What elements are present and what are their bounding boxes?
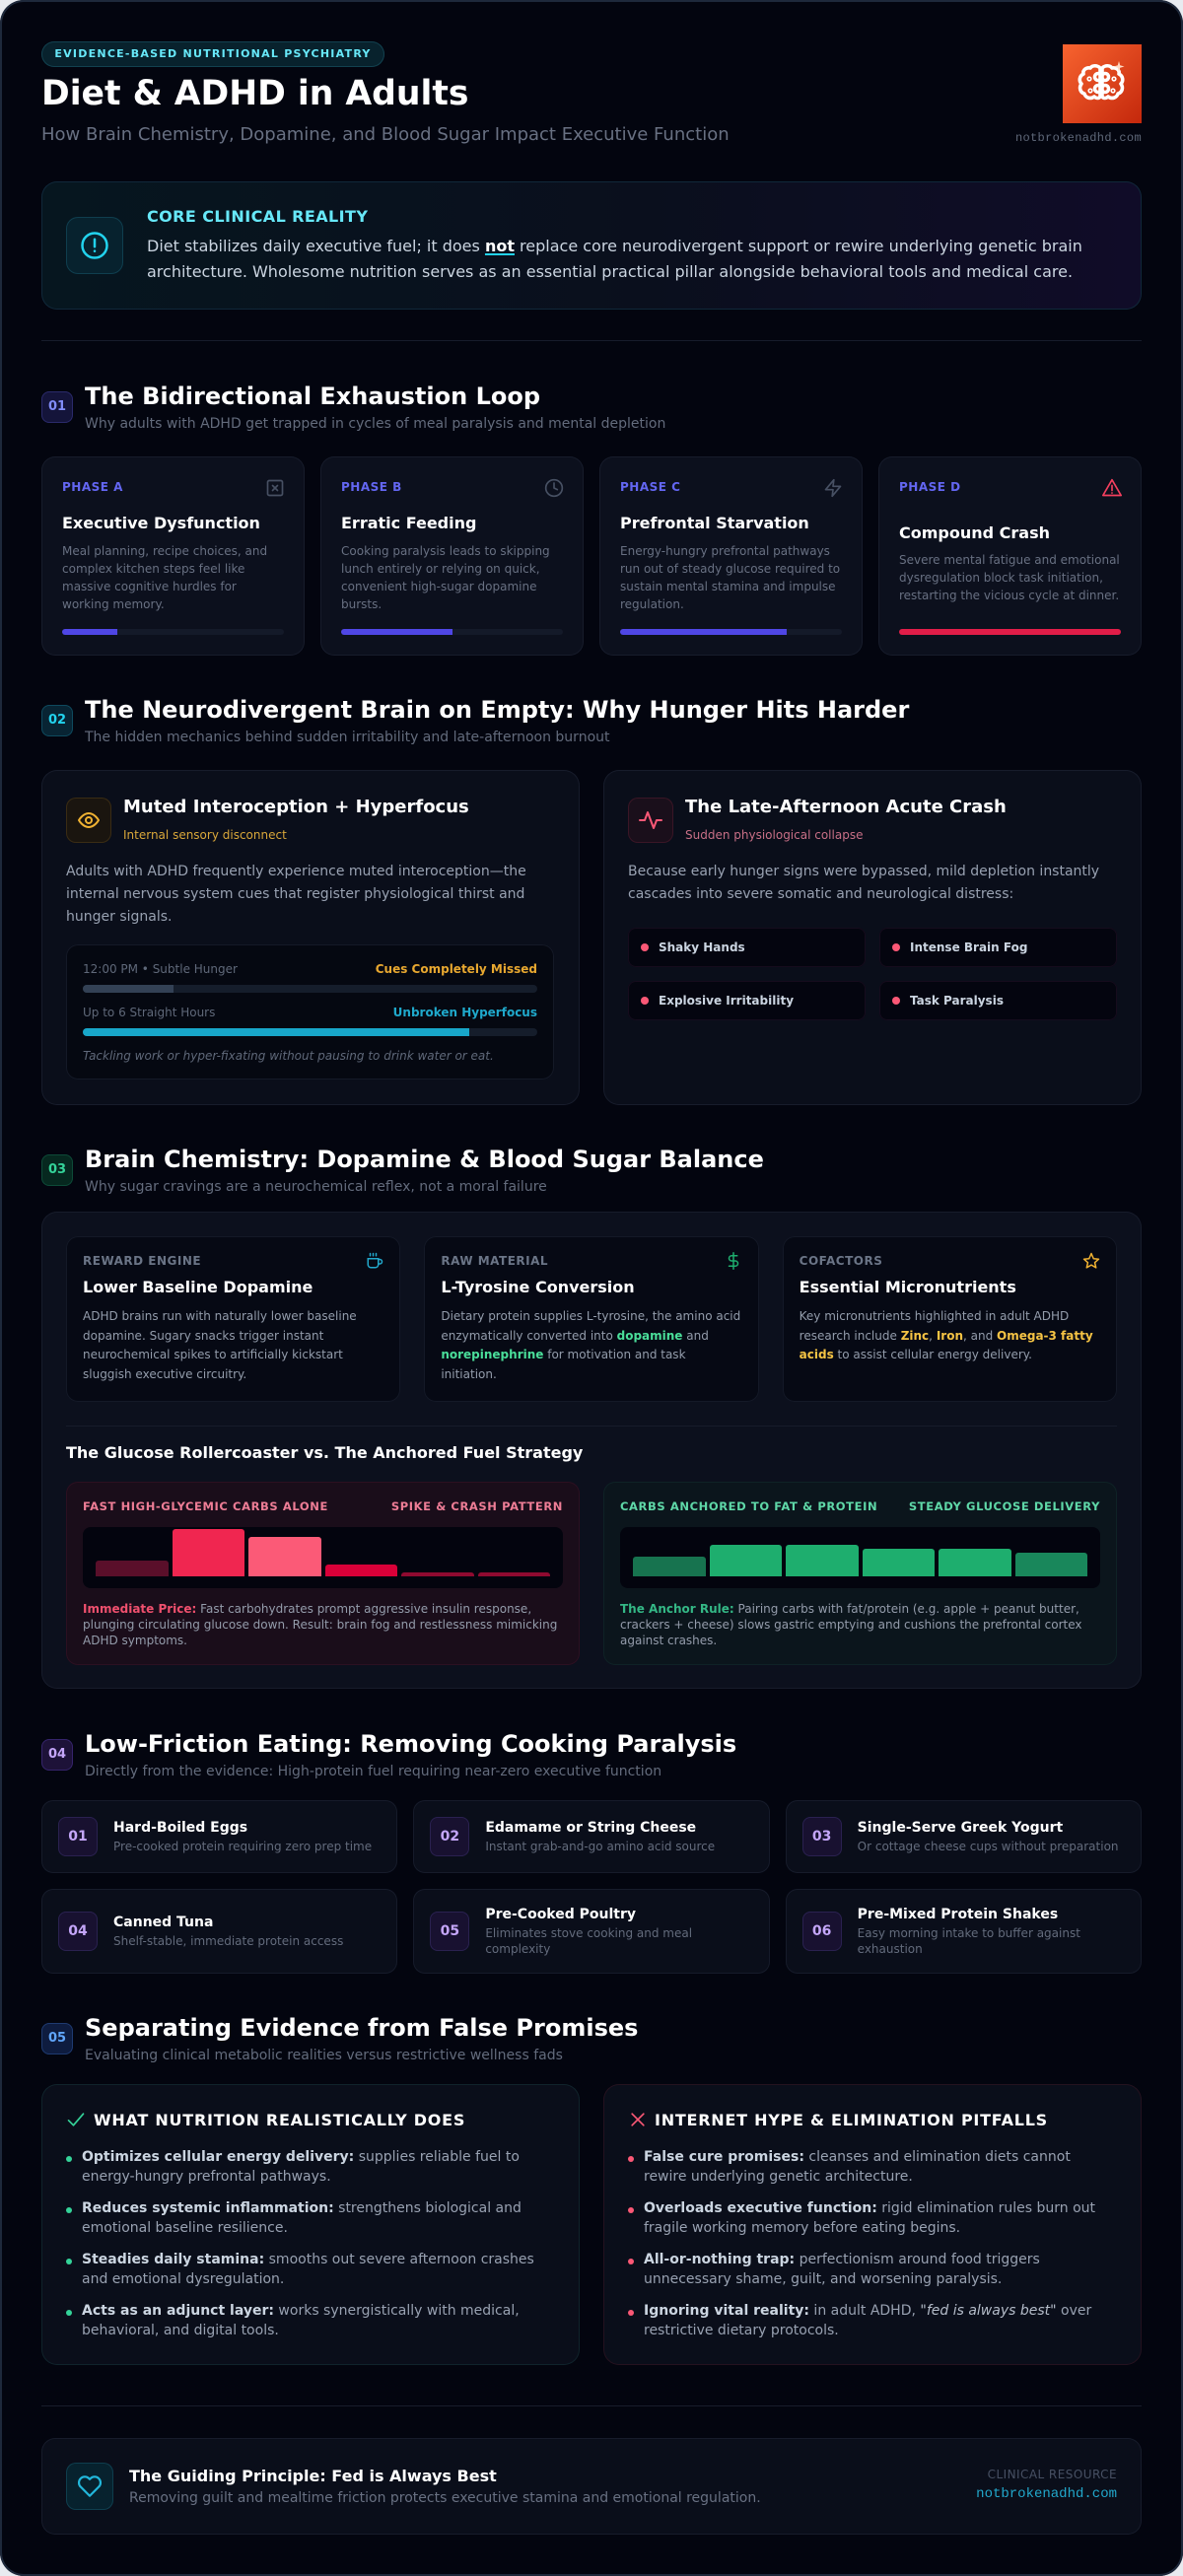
icon: brain logo (1063, 44, 1142, 123)
card: phase C: Prefrontal Starvation (620, 514, 809, 532)
food card: tuna: Shelf-stable, immediate protein access (113, 1934, 343, 1948)
food card: yogurt: 03 (812, 1829, 831, 1845)
card: cofactors: Essential Micronutrients (800, 1278, 1016, 1296)
icon: lightning (824, 479, 842, 497)
bullet: unnecessary shame, guilt, and worsening paralysis. (644, 2271, 1002, 2287)
callout body: architecture. Wholesome nutrition serves as an essential practical pillar alongside behavioral tools and medical care. (147, 262, 1073, 281)
bullet (628, 2149, 1071, 2185)
card: reward engine: REWARD ENGINE (83, 1254, 201, 1268)
card: raw material: norepinephrine for motivation and task (441, 1348, 686, 1361)
panel: spike and crash: FAST HIGH-GLYCEMIC CARBS ALONE (83, 1499, 328, 1513)
icon: cup (367, 1252, 383, 1268)
card: phase B: lunch entirely or relying on quick, (341, 562, 540, 576)
card: phase C: sustain mental stamina and impulse (620, 580, 836, 593)
bullet: Reduces systemic inflammation: strengthens biological and (82, 2200, 522, 2216)
food card: poultry: 05 (441, 1923, 459, 1939)
icon: heart (66, 2463, 113, 2510)
panel: muted interoception (41, 770, 580, 1105)
callout body (147, 237, 1082, 281)
symptom: shaky hands (628, 928, 866, 967)
footer title: The Guiding Principle: Fed is Always Best (129, 2467, 497, 2485)
bullet: energy-hungry prefrontal pathways. (82, 2169, 331, 2185)
card: phase C (599, 456, 863, 656)
panel: late-afternoon crash: Sudden physiological collapse (685, 828, 863, 842)
subtitle: How Brain Chemistry, Dopamine, and Blood Sugar Impact Executive Function (41, 124, 730, 145)
card: phase A: complex kitchen steps feel like (62, 562, 244, 576)
food card: shakes (786, 1889, 1142, 1974)
section heading 04: Directly from the evidence: High-protein fuel requiring near-zero executive function (85, 1764, 661, 1779)
hunger and hyperfocus meters: 12:00 PM • Subtle Hunger (83, 962, 238, 976)
footer website: notbrokenadhd.com (976, 2486, 1117, 2502)
bar chart: spike and crash (83, 1527, 563, 1588)
panel: muted interoception: Muted Interoception + Hyperfocus (123, 797, 469, 817)
panel: anchored fuel: against crashes. (620, 1634, 717, 1647)
bullet: All-or-nothing trap: perfectionism around food triggers (644, 2252, 1040, 2267)
panel: anchored fuel (603, 1482, 1117, 1665)
icon: eye (66, 798, 111, 843)
card: phase B: Cooking paralysis leads to skipping (341, 544, 550, 558)
section heading 05: Separating Evidence from False Promises (85, 2014, 638, 2042)
callout: core clinical reality (41, 181, 1142, 310)
bullet (628, 2252, 1040, 2287)
footer text: Removing guilt and mealtime friction protects executive stamina and emotional regulation. (129, 2490, 761, 2506)
icon: x square (266, 479, 284, 497)
card: phase C: Energy-hungry prefrontal pathways (620, 544, 830, 558)
panel: late-afternoon crash (603, 770, 1142, 1105)
card: phase B: Erratic Feeding (341, 514, 476, 532)
bullet (628, 2303, 1092, 2338)
food card: tuna: 04 (68, 1923, 88, 1939)
header pill: EVIDENCE-BASED NUTRITIONAL PSYCHIATRY (54, 47, 372, 60)
footer panel (41, 2438, 1142, 2535)
symptom: brain fog: Intense Brain Fog (910, 940, 1027, 954)
food card: eggs: Hard-Boiled Eggs (113, 1820, 247, 1836)
section heading 02: The hidden mechanics behind sudden irritability and late-afternoon burnout (85, 730, 609, 745)
food card: tuna (41, 1889, 397, 1974)
clinical resource label: CLINICAL RESOURCE (988, 2468, 1117, 2481)
bullet (66, 2149, 520, 2185)
card: cofactors: COFACTORS (800, 1254, 882, 1268)
section heading 03 (41, 1146, 764, 1195)
food card: shakes: Easy morning intake to buffer against (858, 1926, 1080, 1940)
bullet: Steadies daily stamina: smooths out severe afternoon crashes (82, 2252, 534, 2267)
food card: poultry: complexity (485, 1942, 550, 1956)
card: phase D: Compound Crash (899, 523, 1050, 542)
food card: edamame: Instant grab-and-go amino acid source (485, 1840, 715, 1853)
card: raw material: initiation. (441, 1366, 497, 1380)
food card: shakes: 06 (812, 1923, 831, 1939)
food card: yogurt: Or cottage cheese cups without preparation (858, 1840, 1119, 1853)
symptom: irritability (628, 981, 866, 1020)
card: cofactors: research include Zinc, Iron, and Omega-3 fatty (800, 1329, 1093, 1343)
icon: check (67, 2113, 85, 2126)
card: phase B: PHASE B (341, 480, 402, 494)
card: cofactors: acids to assist cellular energy delivery. (800, 1348, 1032, 1361)
hunger and hyperfocus meters: Cues Completely Missed (376, 962, 537, 976)
section heading 05 (41, 2014, 638, 2063)
section heading 01: 01 (48, 399, 66, 414)
section heading 01 (41, 383, 665, 432)
card: phase B (320, 456, 584, 656)
card: reward engine: neurochemical spikes to artificially kickstart (83, 1348, 343, 1361)
panel: anchored fuel: The Anchor Rule: Pairing carbs with fat/protein (e.g. apple + peanut butter, (620, 1602, 1079, 1616)
bullet: Ignoring vital reality: in adult ADHD, "fed is always best" over (644, 2303, 1091, 2319)
section heading 03: Brain Chemistry: Dopamine & Blood Sugar Balance (85, 1146, 764, 1173)
bullet: behavioral, and digital tools. (82, 2323, 279, 2338)
section heading 03: Why sugar cravings are a neurochemical reflex, not a moral failure (85, 1179, 547, 1195)
card: reward engine (66, 1236, 400, 1402)
panel: anchored fuel: STEADY GLUCOSE DELIVERY (909, 1499, 1100, 1513)
panel: spike and crash: plunging circulating glucose down. Result: brain fog and restlessness mimicking (83, 1618, 557, 1632)
symptom: task paralysis (879, 981, 1117, 1020)
food card: eggs: Pre-cooked protein requiring zero prep time (113, 1840, 372, 1853)
panel: anchored fuel: CARBS ANCHORED TO FAT & PROTEIN (620, 1499, 877, 1513)
food card: poultry: Eliminates stove cooking and meal (485, 1926, 692, 1940)
panel: late-afternoon crash: The Late-Afternoon Acute Crash (685, 797, 1007, 817)
panel: spike and crash: Immediate Price: Fast carbohydrates prompt aggressive insulin response, (83, 1602, 531, 1616)
card: phase C: regulation. (620, 597, 684, 611)
food card: eggs (41, 1800, 397, 1873)
panel: muted interoception: Adults with ADHD frequently experience muted interoception—the (66, 864, 526, 879)
icon: cross (631, 2113, 645, 2126)
panel: brain chemistry (41, 1212, 1142, 1689)
food card: tuna: Canned Tuna (113, 1915, 213, 1930)
card: raw material: enzymatically converted into dopamine and (441, 1329, 709, 1343)
panel: what nutrition does: WHAT NUTRITION REALISTICALLY DOES (94, 2111, 465, 2129)
panel: spike and crash: ADHD symptoms. (83, 1634, 187, 1647)
card: reward engine: dopamine. Sugary snacks trigger instant (83, 1329, 323, 1343)
bullet: and emotional dysregulation. (82, 2271, 284, 2287)
card: phase A: Meal planning, recipe choices, and (62, 544, 267, 558)
card: reward engine: Lower Baseline Dopamine (83, 1278, 313, 1296)
panel: anchored fuel: crackers + cheese) slows gastric emptying and cushions the prefrontal cortex (620, 1618, 1082, 1632)
bullet (66, 2200, 522, 2236)
panel: what nutrition does (41, 2084, 580, 2365)
card: raw material: L-Tyrosine Conversion (441, 1278, 635, 1296)
card: phase D: dysregulation block task initiation, (899, 571, 1103, 585)
bar chart: steady glucose (620, 1527, 1100, 1588)
card: cofactors (783, 1236, 1117, 1402)
icon: dollar (728, 1252, 739, 1270)
bullet: Optimizes cellular energy delivery: supplies reliable fuel to (82, 2149, 520, 2165)
section heading 03: 03 (48, 1162, 66, 1177)
panel: muted interoception: internal nervous system cues that register physiological thirst and (66, 885, 524, 901)
symptom: task paralysis: Task Paralysis (910, 994, 1004, 1008)
panel: internet hype (603, 2084, 1142, 2365)
bullet: restrictive dietary protocols. (644, 2323, 839, 2338)
section heading 04: Low-Friction Eating: Removing Cooking Paralysis (85, 1730, 736, 1758)
callout heading: CORE CLINICAL REALITY (147, 207, 368, 226)
food card: yogurt (786, 1800, 1142, 1873)
subheading: glucose comparison: The Glucose Rollercoaster vs. The Anchored Fuel Strategy (66, 1443, 583, 1462)
food card: shakes: exhaustion (858, 1942, 923, 1956)
icon: clock (544, 479, 564, 497)
card: phase C: run out of steady glucose required to (620, 562, 840, 576)
title: Diet & ADHD in Adults (41, 74, 469, 113)
section heading 02: The Neurodivergent Brain on Empty: Why Hunger Hits Harder (85, 696, 909, 724)
icon: warning triangle (1102, 479, 1122, 497)
bullet: rewire underlying genetic architecture. (644, 2169, 913, 2185)
section heading 05: Evaluating clinical metabolic realities versus restrictive wellness fads (85, 2048, 563, 2063)
section heading 02: 02 (48, 713, 66, 728)
card: phase C: PHASE C (620, 480, 680, 494)
card: phase A: PHASE A (62, 480, 123, 494)
card: raw material: RAW MATERIAL (441, 1254, 548, 1268)
panel: spike and crash (66, 1482, 580, 1665)
card: phase D (878, 456, 1142, 656)
card: phase D: restarting the vicious cycle at dinner. (899, 589, 1119, 602)
food card: edamame: 02 (441, 1829, 459, 1845)
section heading 04 (41, 1730, 736, 1779)
bullet: emotional baseline resilience. (82, 2220, 288, 2236)
icon: alert circle (66, 217, 123, 274)
food card: shakes: Pre-Mixed Protein Shakes (858, 1907, 1058, 1922)
bullet: fragile working memory before eating begins. (644, 2220, 960, 2236)
hunger and hyperfocus meters: Up to 6 Straight Hours (83, 1006, 215, 1019)
callout body: Diet stabilizes daily executive fuel; it does not replace core neurodivergent support or rewire underlying genetic brain (147, 237, 1082, 255)
card: phase A: massive cognitive hurdles for (62, 580, 237, 593)
panel: late-afternoon crash: Because early hunger signs were bypassed, mild depletion instantly (628, 864, 1099, 879)
panel: spike and crash: SPIKE & CRASH PATTERN (391, 1499, 563, 1513)
section heading 05: 05 (48, 2031, 66, 2046)
section heading 02 (41, 696, 909, 745)
section heading 04: 04 (48, 1747, 66, 1762)
symptom: shaky hands: Shaky Hands (659, 940, 745, 954)
bullet (628, 2200, 1095, 2236)
bullet (66, 2303, 520, 2338)
icon: pulse (628, 798, 673, 843)
card: phase D: PHASE D (899, 480, 961, 494)
symptom: brain fog (879, 928, 1117, 967)
panel: internet hype: INTERNET HYPE & ELIMINATION PITFALLS (655, 2111, 1048, 2129)
bullet (66, 2252, 534, 2287)
panel: muted interoception: Internal sensory disconnect (123, 828, 287, 842)
hunger and hyperfocus meters: Tackling work or hyper-fixating without pausing to drink water or eat. (83, 1049, 494, 1063)
card: phase A (41, 456, 305, 656)
card: phase D: Severe mental fatigue and emotional (899, 553, 1120, 567)
section heading 01: The Bidirectional Exhaustion Loop (85, 383, 540, 410)
card: cofactors: Key micronutrients highlighted in adult ADHD (800, 1309, 1069, 1323)
card: phase A: working memory. (62, 597, 165, 611)
food card: poultry (413, 1889, 770, 1974)
card: phase B: convenient high-sugar dopamine (341, 580, 536, 593)
website label: notbrokenadhd.com (1015, 131, 1142, 145)
card: reward engine: sluggish executive circuitry. (83, 1366, 246, 1380)
header pill (41, 41, 384, 67)
panel: late-afternoon crash: cascades into severe somatic and neurological distress: (628, 885, 1013, 901)
symptom: irritability: Explosive Irritability (659, 994, 794, 1008)
card: phase B: bursts. (341, 597, 382, 611)
food card: eggs: 01 (68, 1829, 88, 1845)
bullet: False cure promises: cleanses and elimination diets cannot (644, 2149, 1071, 2165)
panel: muted interoception: hunger signals. (66, 909, 172, 925)
section heading 01: Why adults with ADHD get trapped in cycles of meal paralysis and mental depletion (85, 416, 665, 432)
card: raw material: Dietary protein supplies L-tyrosine, the amino acid (441, 1309, 740, 1323)
hunger and hyperfocus meters (66, 944, 554, 1079)
card: phase A: Executive Dysfunction (62, 514, 260, 532)
food card: edamame: Edamame or String Cheese (485, 1820, 696, 1836)
icon: star (1082, 1252, 1100, 1269)
bullet: Acts as an adjunct layer: works synergistically with medical, (82, 2303, 520, 2319)
bullet: Overloads executive function: rigid elimination rules burn out (644, 2200, 1095, 2216)
card: raw material (424, 1236, 759, 1402)
card: reward engine: ADHD brains run with naturally lower baseline (83, 1309, 357, 1323)
food card: yogurt: Single-Serve Greek Yogurt (858, 1820, 1063, 1836)
food card: edamame (413, 1800, 770, 1873)
hunger and hyperfocus meters: Unbroken Hyperfocus (393, 1006, 537, 1019)
food card: poultry: Pre-Cooked Poultry (485, 1907, 636, 1922)
